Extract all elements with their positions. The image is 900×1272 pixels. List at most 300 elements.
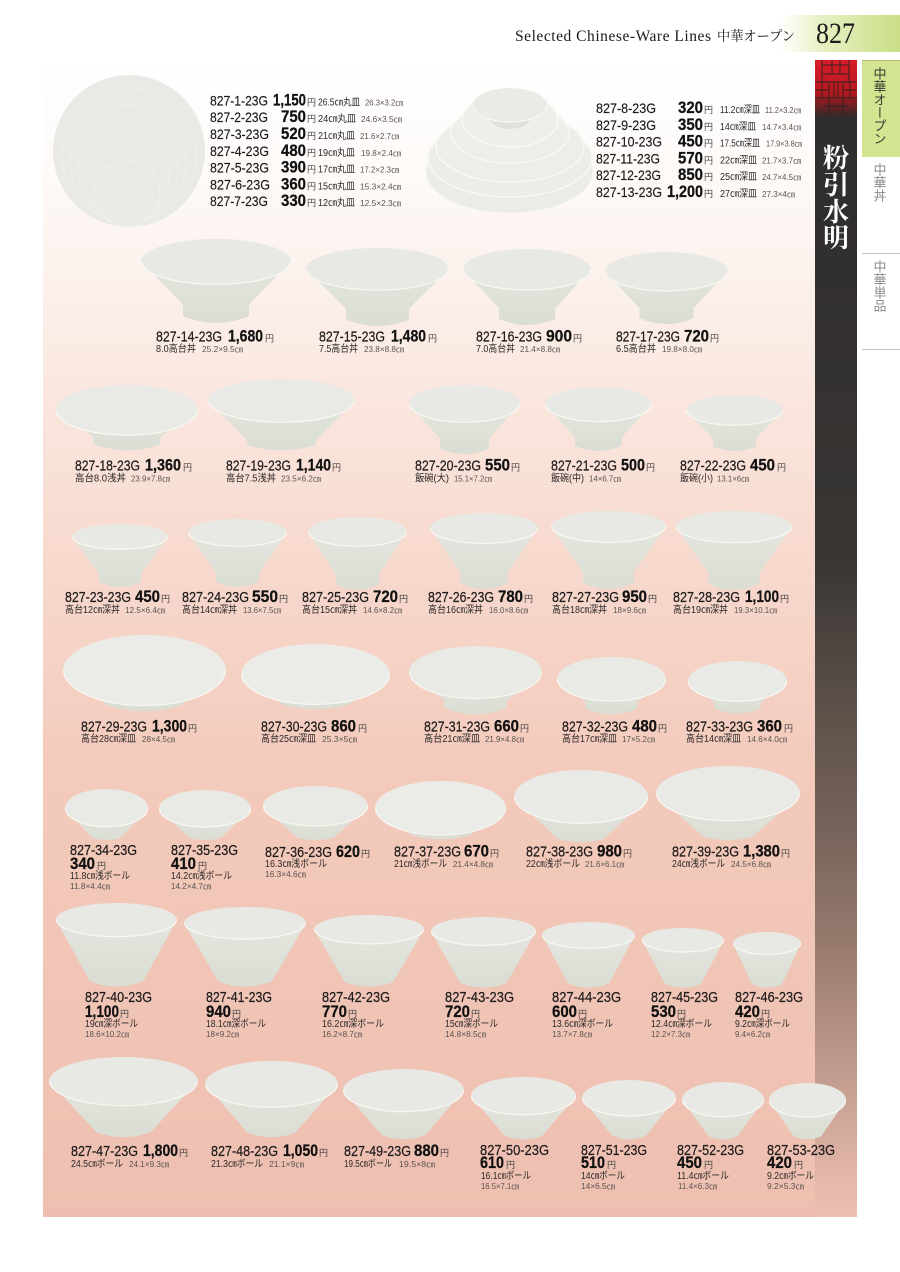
deep plates price list: 11.2㎝深皿	[720, 104, 760, 116]
product 827-52: 827-52-23G	[677, 1143, 744, 1159]
round plates price list: 24㎝丸皿	[318, 112, 356, 125]
product 827-43: 15㎝深ボール	[445, 1018, 498, 1030]
product 827-45: 12.4㎝深ボール	[651, 1018, 712, 1030]
product 827-44: 600	[552, 1003, 577, 1021]
deep plates price list: 450	[678, 132, 703, 150]
round plates price list: 390	[281, 158, 306, 176]
product 827-38: 円	[623, 848, 632, 858]
product 827-27	[551, 511, 666, 616]
deep plates price list: 827-12-23G	[596, 167, 661, 183]
product 827-29: 高台28㎝深皿	[81, 732, 136, 745]
round plates price list: 26.3×3.2㎝	[365, 98, 403, 108]
product 827-17: 6.5高台丼	[616, 342, 656, 355]
product 827-39: 1,380	[743, 842, 780, 860]
product 827-38: 980	[597, 842, 622, 860]
product 827-48: 1,050	[283, 1142, 318, 1160]
product 827-47: 円	[179, 1148, 188, 1158]
product 827-48: 21.3㎝ボール	[211, 1158, 263, 1170]
product 827-30: 高台25㎝深皿	[261, 732, 316, 745]
deep plates price list: 14㎝深皿	[720, 121, 756, 133]
product 827-22: 円	[777, 462, 786, 472]
header title: Selected Chinese-Ware Lines	[515, 28, 711, 45]
round plates price list: 21㎝丸皿	[318, 129, 355, 142]
product 827-21: 飯碗(中)	[551, 472, 584, 484]
product 827-50: 16.1㎝ボール	[481, 1170, 531, 1182]
product 827-46: 420	[735, 1003, 760, 1021]
product 827-19: 高台7.5浅丼	[226, 472, 276, 484]
product 827-45	[642, 928, 724, 1039]
product 827-44	[542, 922, 635, 1039]
product 827-53: 9.2×5.3㎝	[767, 1182, 804, 1191]
product 827-52: 11.4㎝ボール	[677, 1170, 729, 1182]
product 827-40: 827-40-23G	[85, 990, 152, 1006]
product 827-32: 17×5.2㎝	[622, 735, 655, 744]
product 827-35: 14.2×4.7㎝	[171, 882, 211, 891]
product 827-36	[263, 786, 370, 879]
product 827-46: 円	[761, 1009, 770, 1019]
product 827-47	[49, 1057, 198, 1170]
product 827-43: 円	[471, 1009, 480, 1019]
product 827-23: 450	[135, 588, 160, 606]
product 827-28: 円	[780, 594, 789, 604]
product 827-18: 23.9×7.8㎝	[131, 474, 170, 484]
product 827-16	[463, 249, 591, 355]
product 827-28: 高台19㎝深丼	[673, 603, 728, 616]
product 827-22: 飯碗(小)	[680, 472, 713, 484]
deep plates price list: 11.2×3.2㎝	[765, 106, 801, 115]
product 827-26: 827-26-23G	[428, 590, 494, 606]
product 827-48: 827-48-23G	[211, 1144, 278, 1160]
product 827-15: 7.5高台丼	[319, 342, 358, 355]
product 827-30: 860	[331, 718, 356, 736]
product 827-50: 16.5×7.1㎝	[481, 1182, 519, 1191]
product 827-19: 827-19-23G	[226, 458, 291, 474]
product 827-29: 28×4.5㎝	[142, 735, 175, 744]
deep plates price list: 円	[704, 122, 713, 132]
round plates price list	[210, 92, 403, 210]
product 827-41	[184, 907, 306, 1039]
product 827-52	[677, 1082, 764, 1191]
product 827-35: 827-35-23G	[171, 843, 238, 859]
product 827-25	[302, 517, 408, 616]
product 827-49: 827-49-23G	[344, 1144, 411, 1160]
red lattice logo	[815, 60, 857, 118]
product 827-22: 13.1×6㎝	[717, 474, 749, 484]
product 827-46: 9.2㎝深ボール	[735, 1018, 790, 1030]
product 827-42: 16.2×8.7㎝	[322, 1030, 362, 1039]
product 827-36: 620	[336, 843, 360, 861]
product 827-47: 827-47-23G	[71, 1144, 138, 1160]
round plates price list: 24.6×3.5㎝	[361, 115, 402, 124]
round plates price list: 円	[307, 131, 316, 141]
product 827-31	[409, 646, 542, 745]
product 827-34	[65, 789, 148, 891]
product 827-18: 827-18-23G	[75, 458, 140, 474]
round plates price list: 19.8×2.4㎝	[361, 149, 401, 158]
product 827-32: 480	[632, 718, 657, 736]
product 827-18	[56, 385, 198, 484]
product 827-22	[680, 395, 786, 484]
round plates price list: 円	[307, 114, 316, 124]
product 827-15: 円	[428, 334, 437, 344]
product 827-20: 円	[511, 462, 520, 472]
product 827-22: 827-22-23G	[680, 458, 746, 474]
product 827-52: 11.4×6.3㎝	[678, 1182, 717, 1191]
product 827-39: 24.5×6.8㎝	[731, 860, 771, 869]
product 827-33	[686, 661, 793, 745]
round plates price list: 26.5㎝丸皿	[318, 96, 360, 108]
header band	[515, 15, 900, 52]
product 827-37: 670	[464, 842, 489, 860]
product 827-27: 円	[648, 594, 657, 604]
round plates price list: 827-1-23G	[210, 92, 268, 108]
product 827-29	[63, 635, 226, 745]
product 827-39: 24㎝浅ボール	[672, 857, 725, 870]
product 827-50: 円	[506, 1160, 515, 1170]
product 827-34: 827-34-23G	[70, 843, 137, 859]
product 827-23	[65, 524, 170, 616]
round plates price list: 21.6×2.7㎝	[360, 132, 399, 141]
deep plates price list: 570	[678, 150, 703, 168]
product 827-51: 510	[581, 1154, 605, 1172]
round plates price list: 827-2-23G	[210, 109, 268, 125]
product 827-44: 円	[578, 1009, 587, 1019]
product 827-34: 340	[70, 855, 95, 873]
round plates price list: 827-7-23G	[210, 193, 268, 209]
product 827-30: 円	[358, 724, 367, 734]
product 827-38: 827-38-23G	[526, 844, 593, 860]
product 827-19: 円	[332, 462, 341, 472]
deep plates price list: 14.7×3.4㎝	[762, 123, 801, 132]
round plates price list: 円	[307, 98, 316, 108]
product 827-22: 450	[750, 456, 775, 474]
product 827-19: 23.5×6.2㎝	[281, 474, 321, 484]
product 827-35: 410	[171, 855, 196, 873]
product 827-36: 16.3×4.6㎝	[265, 870, 306, 879]
product 827-21	[545, 387, 655, 484]
product 827-27: 高台18㎝深丼	[552, 603, 607, 616]
product 827-37: 827-37-23G	[394, 844, 461, 860]
product 827-50: 610	[480, 1154, 504, 1172]
round plates price list: 827-3-23G	[210, 126, 269, 142]
deep plates price list: 827-10-23G	[596, 134, 662, 150]
product 827-23: 827-23-23G	[65, 590, 131, 606]
product 827-51: 14×6.5㎝	[581, 1182, 615, 1191]
product 827-27: 18×9.6㎝	[613, 606, 646, 615]
product 827-33: 円	[784, 724, 793, 734]
product 827-17: 720	[684, 328, 709, 346]
product 827-16: 900	[546, 328, 572, 346]
product 827-48	[205, 1061, 338, 1170]
product 827-25: 円	[399, 594, 408, 604]
round plates price list: 330	[281, 192, 306, 210]
deep plates price list: 320	[678, 99, 703, 117]
product 827-42: 827-42-23G	[322, 990, 390, 1006]
product 827-32: 827-32-23G	[562, 720, 628, 736]
series title 粉引水明: 明	[823, 224, 849, 253]
product 827-16: 827-16-23G	[476, 330, 542, 346]
product 827-14: 25.2×9.5㎝	[202, 345, 243, 354]
product 827-46: 827-46-23G	[735, 990, 803, 1006]
round plates photo	[53, 75, 205, 227]
round plates price list: 827-4-23G	[210, 143, 269, 159]
product 827-44: 827-44-23G	[552, 990, 621, 1006]
product 827-50: 827-50-23G	[480, 1143, 549, 1159]
product 827-20: 15.1×7.2㎝	[454, 474, 492, 484]
product 827-18: 1,360	[145, 456, 181, 474]
product 827-47: 24.5㎝ボール	[71, 1158, 123, 1170]
product 827-29: 1,300	[152, 718, 187, 736]
product 827-17	[605, 252, 728, 355]
product 827-45: 827-45-23G	[651, 990, 718, 1006]
deep plates price list: 850	[678, 166, 703, 184]
product 827-35	[159, 790, 251, 891]
side tab: 中華丼: 中華丼	[870, 163, 890, 202]
product 827-25: 14.6×8.2㎝	[363, 606, 402, 615]
product 827-48: 円	[319, 1148, 328, 1158]
product 827-21: 14×6.7㎝	[589, 474, 621, 484]
product 827-40: 19㎝深ボール	[85, 1018, 138, 1030]
deep plates price list: 22㎝深皿	[720, 154, 757, 166]
product 827-51	[581, 1080, 676, 1191]
round plates price list: 12.5×2.3㎝	[360, 199, 401, 208]
product 827-26: 780	[498, 588, 523, 606]
product 827-19: 1,140	[296, 456, 331, 474]
dark vertical title column	[815, 60, 857, 1217]
product 827-24: 13.6×7.5㎝	[243, 606, 281, 615]
product 827-35: 14.2㎝浅ボール	[171, 869, 232, 882]
deep plates price list: 17.5㎝深皿	[720, 138, 760, 150]
product 827-15: 23.8×8.8㎝	[364, 345, 404, 354]
product 827-24: 550	[252, 588, 278, 606]
product 827-15: 827-15-23G	[319, 330, 385, 346]
product 827-52: 円	[704, 1160, 713, 1170]
product 827-53: 円	[794, 1160, 803, 1170]
product 827-42: 770	[322, 1003, 347, 1021]
product 827-41: 827-41-23G	[206, 990, 272, 1006]
product 827-20: 827-20-23G	[415, 458, 481, 474]
series title 粉引水明: 引	[823, 171, 849, 200]
product 827-50	[471, 1077, 576, 1191]
product 827-37: 21㎝浅ボール	[394, 857, 447, 870]
product 827-34: 11.8×4.4㎝	[70, 882, 110, 891]
product 827-39	[656, 766, 800, 870]
product 827-24: 円	[279, 594, 288, 604]
product 827-49	[343, 1069, 464, 1170]
product 827-40	[56, 903, 177, 1039]
product 827-28: 1,100	[745, 588, 779, 606]
product 827-24: 高台14㎝深丼	[182, 603, 237, 616]
product 827-24: 827-24-23G	[182, 590, 249, 606]
round plates price list: 480	[281, 142, 306, 160]
deep plates price list: 円	[704, 156, 713, 166]
round plates price list: 827-5-23G	[210, 160, 269, 176]
product 827-36: 円	[361, 849, 370, 859]
product 827-53	[767, 1083, 846, 1191]
product 827-40: 18.6×10.2㎝	[85, 1030, 129, 1039]
product 827-23: 円	[161, 594, 170, 604]
product 827-14: 8.0高台丼	[156, 342, 196, 355]
product 827-34: 円	[97, 861, 106, 871]
product 827-28: 19.3×10.1㎝	[734, 606, 777, 615]
deep plates price list: 350	[678, 116, 703, 134]
product 827-37: 21.4×4.8㎝	[453, 860, 493, 869]
deep plates price list: 27㎝深皿	[720, 188, 757, 200]
deep plates price list: 円	[704, 172, 713, 182]
round plates price list: 19㎝丸皿	[318, 146, 355, 159]
product 827-28: 827-28-23G	[673, 590, 740, 606]
round plates price list: 17.2×2.3㎝	[360, 166, 399, 174]
product 827-53: 420	[767, 1154, 792, 1172]
series title 粉引水明: 粉	[823, 144, 849, 173]
product 827-21: 円	[646, 462, 655, 472]
deep plates price list: 17.9×3.8㎝	[766, 140, 802, 148]
deep plates price list: 827-13-23G	[596, 184, 662, 200]
series title 粉引水明: 水	[823, 198, 849, 227]
product 827-42	[314, 915, 424, 1039]
product 827-26: 高台16㎝深丼	[428, 603, 483, 616]
product 827-35: 円	[198, 861, 207, 871]
product 827-17: 円	[710, 334, 719, 344]
product 827-39: 827-39-23G	[672, 844, 739, 860]
round plates price list: 円	[307, 148, 316, 158]
product 827-46	[733, 932, 803, 1039]
side tab: 中華丼	[862, 163, 900, 254]
product 827-52: 450	[677, 1154, 702, 1172]
side tab: 中華単品: 中華単品	[870, 260, 890, 312]
product 827-45: 12.2×7.3㎝	[651, 1030, 690, 1039]
product 827-42: 円	[348, 1009, 357, 1019]
product 827-14	[141, 239, 291, 355]
deep plates price list: 円	[704, 189, 713, 199]
product 827-15: 1,480	[391, 328, 426, 346]
product 827-33: 高台14㎝深皿	[686, 732, 741, 745]
product 827-17: 827-17-23G	[616, 330, 680, 346]
product 827-49: 19.5×8㎝	[399, 1160, 435, 1169]
product 827-28	[673, 511, 792, 616]
product 827-42: 16.2㎝深ボール	[322, 1018, 384, 1030]
product 827-23: 高台12㎝深丼	[65, 603, 120, 616]
product 827-40: 円	[120, 1009, 129, 1019]
deep plates price list: 1,200	[667, 183, 703, 201]
product 827-49: 円	[440, 1148, 449, 1158]
product 827-41: 円	[232, 1009, 241, 1019]
round plates price list: 360	[281, 176, 306, 194]
product 827-18: 円	[183, 462, 192, 472]
round plates price list: 750	[281, 108, 306, 126]
side tab: active 中華オープン	[862, 60, 900, 157]
product 827-36: 827-36-23G	[265, 845, 332, 861]
product 827-14: 円	[265, 334, 274, 344]
product 827-51: 円	[607, 1160, 616, 1170]
deep plates price list: 21.7×3.7㎝	[762, 156, 801, 166]
round plates price list: 円	[307, 164, 316, 174]
product 827-14: 827-14-23G	[156, 330, 222, 346]
side tab: 中華単品	[862, 260, 900, 350]
product 827-47: 1,800	[143, 1142, 178, 1160]
product 827-25: 高台15㎝深丼	[302, 603, 357, 616]
product 827-31: 高台21㎝深皿	[424, 732, 480, 745]
product 827-39: 円	[781, 848, 790, 858]
product 827-25: 720	[373, 588, 398, 606]
product 827-53: 827-53-23G	[767, 1143, 835, 1159]
product 827-41: 18.1㎝深ボール	[206, 1018, 266, 1030]
product 827-23: 12.5×6.4㎝	[125, 606, 165, 615]
product 827-38: 21.6×6.1㎝	[585, 860, 624, 869]
product 827-21: 827-21-23G	[551, 458, 617, 474]
product 827-43	[431, 917, 536, 1039]
deep plates price list: 827-8-23G	[596, 100, 656, 116]
round plates price list: 827-6-23G	[210, 176, 270, 192]
product 827-16: 7.0高台丼	[476, 342, 515, 355]
product 827-31: 827-31-23G	[424, 720, 490, 736]
product 827-17: 19.8×8.0㎝	[662, 345, 702, 354]
product 827-53: 9.2㎝ボール	[767, 1170, 814, 1182]
round plates price list: 520	[281, 125, 306, 143]
round plates price list: 17㎝丸皿	[318, 162, 355, 176]
stacked deep plates photo	[426, 88, 593, 213]
product 827-43: 720	[445, 1003, 470, 1021]
product 827-27: 950	[622, 588, 647, 606]
product 827-47: 24.1×9.3㎝	[129, 1160, 169, 1169]
product 827-30	[241, 644, 390, 745]
product 827-36: 16.3㎝浅ボール	[265, 857, 327, 870]
deep plates price list: 円	[704, 105, 713, 115]
product 827-30: 25.3×5㎝	[322, 735, 357, 744]
product 827-27: 827-27-23G	[552, 590, 619, 606]
deep plates price list	[596, 99, 802, 201]
product 827-51: 827-51-23G	[581, 1143, 647, 1159]
round plates price list: 円	[307, 198, 316, 208]
product 827-43: 14.8×8.5㎝	[445, 1030, 486, 1039]
product 827-32: 円	[658, 724, 667, 734]
product 827-30: 827-30-23G	[261, 720, 327, 736]
product 827-15	[306, 248, 449, 355]
product 827-25: 827-25-23G	[302, 590, 369, 606]
product 827-32	[557, 657, 667, 745]
product 827-33: 14.6×4.0㎝	[747, 735, 787, 744]
product 827-33: 360	[757, 718, 782, 736]
deep plates price list: 24.7×4.5㎝	[762, 173, 801, 182]
header japanese title: 中華オープン	[717, 28, 795, 45]
product 827-33: 827-33-23G	[686, 720, 753, 736]
product 827-34: 11.8㎝浅ボール	[70, 869, 130, 882]
round plates price list: 15㎝丸皿	[318, 180, 355, 192]
product 827-41: 940	[206, 1003, 231, 1021]
product 827-45: 530	[651, 1003, 676, 1021]
round plates price list: 円	[307, 182, 316, 192]
product 827-20: 550	[485, 456, 510, 474]
product 827-20	[409, 385, 520, 484]
product 827-44: 13.6㎝深ボール	[552, 1018, 613, 1030]
product 827-31: 21.9×4.8㎝	[485, 735, 524, 744]
round plates price list: 12㎝丸皿	[318, 196, 355, 209]
product 827-18: 高台8.0浅丼	[75, 472, 126, 484]
deep plates price list: 円	[704, 138, 713, 148]
page number: 827	[816, 17, 855, 50]
product 827-29: 円	[188, 724, 197, 734]
product 827-24	[182, 519, 288, 616]
deep plates price list: 25㎝深皿	[720, 171, 757, 183]
deep plates price list: 827-11-23G	[596, 150, 660, 166]
product 827-46: 9.4×6.2㎝	[735, 1030, 770, 1039]
product 827-40: 1,100	[85, 1003, 119, 1021]
product 827-49: 880	[414, 1142, 439, 1160]
product 827-16: 21.4×8.8㎝	[520, 345, 560, 354]
product 827-38	[514, 770, 648, 870]
product 827-43: 827-43-23G	[445, 990, 514, 1006]
product 827-16: 円	[573, 334, 582, 344]
